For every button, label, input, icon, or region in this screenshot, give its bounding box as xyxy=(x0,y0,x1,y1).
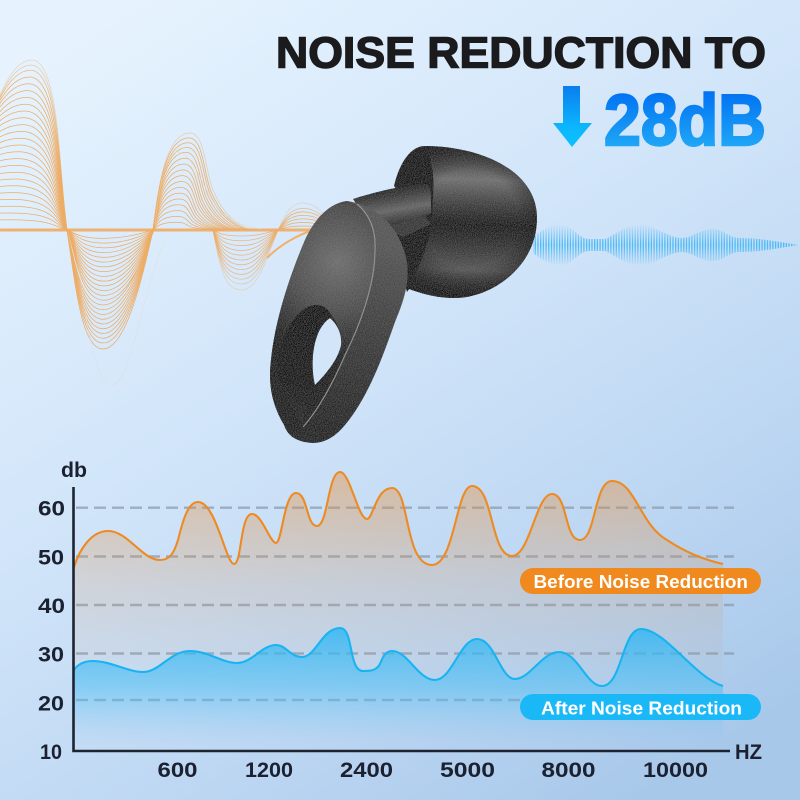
x axis labels: 5000 xyxy=(440,759,495,782)
x axis labels: HZ xyxy=(735,741,762,764)
y axis labels: 60 xyxy=(38,498,65,520)
legend: before noise reduction: Before Noise Reduction xyxy=(534,571,748,592)
y axis labels: 20 xyxy=(38,692,64,716)
y axis labels: 50 xyxy=(38,546,64,570)
after area xyxy=(74,628,723,751)
ear tip inner opening xyxy=(394,146,434,225)
grid lines xyxy=(76,508,734,700)
x axis labels: 2400 xyxy=(340,759,393,782)
x axis labels xyxy=(158,741,762,782)
y axis labels xyxy=(38,459,87,764)
earplug product xyxy=(270,146,537,443)
ear tip dome xyxy=(406,146,537,298)
legend: after noise reduction xyxy=(520,694,761,720)
recess xyxy=(278,305,341,425)
stem xyxy=(353,184,431,229)
orange incoming sound wave xyxy=(0,60,330,385)
chart: noise level xyxy=(38,459,762,782)
title: noise reduction to: NOISE REDUCTION TO xyxy=(276,28,766,78)
blue reduced sound wave xyxy=(533,225,798,265)
see-through hole xyxy=(313,318,341,385)
flange face xyxy=(270,201,375,431)
after line xyxy=(74,628,723,686)
before area xyxy=(74,472,723,751)
icon: down arrow xyxy=(553,86,592,147)
x axis labels: 10000 xyxy=(643,759,708,782)
ear tip edge shading xyxy=(406,146,537,298)
flange lip highlight xyxy=(303,204,375,427)
y axis labels: 30 xyxy=(38,644,64,666)
y axis labels: 40 xyxy=(38,595,65,618)
y axis labels: db xyxy=(61,459,87,482)
heading: 28dB: 28dB xyxy=(604,81,766,161)
axes xyxy=(74,487,730,751)
under-stem shadow xyxy=(378,208,433,292)
flange back xyxy=(270,201,408,443)
legend: after noise reduction: After Noise Reduction xyxy=(541,698,742,718)
before line xyxy=(74,472,723,567)
stem wedge xyxy=(383,216,431,237)
x axis labels: 1200 xyxy=(245,759,293,782)
x axis labels: 8000 xyxy=(542,759,596,782)
x axis labels: 600 xyxy=(158,759,198,782)
y axis labels: 10 xyxy=(40,741,62,764)
